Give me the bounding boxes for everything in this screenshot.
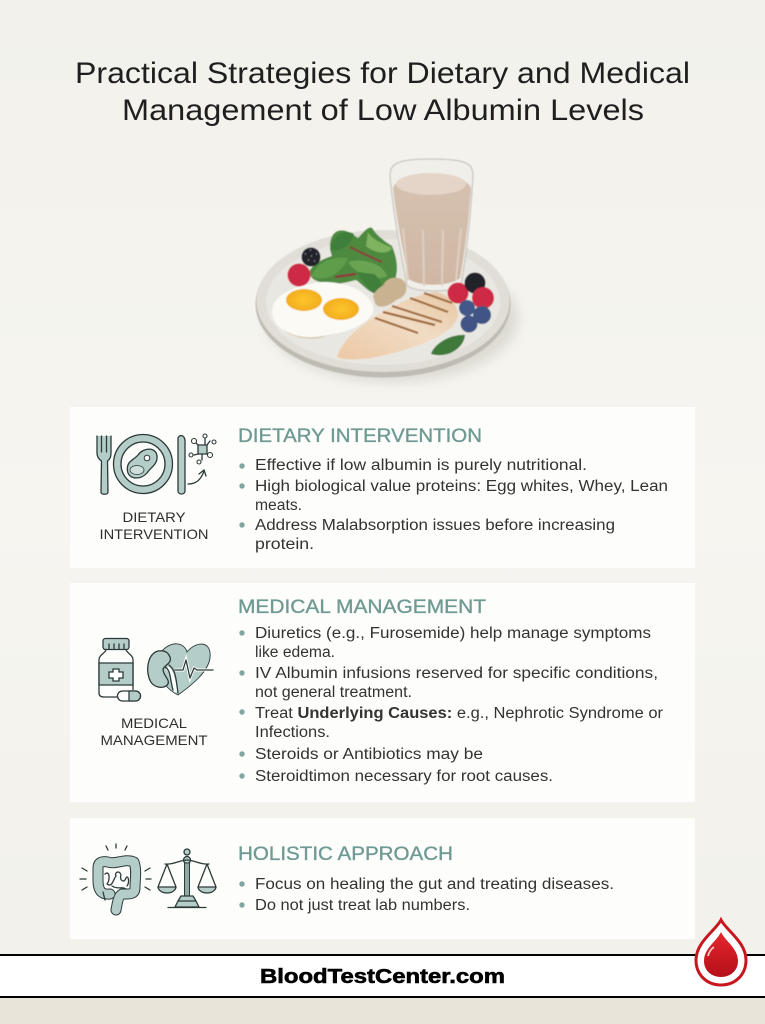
plate <box>256 230 510 378</box>
bullet list <box>239 876 614 914</box>
panel: medical management <box>70 583 695 802</box>
spinach leaf <box>431 335 465 355</box>
heading: DIETARY INTERVENTION <box>238 425 482 447</box>
bullet list: meats. <box>255 497 302 514</box>
bullet list: like edema. <box>255 644 335 661</box>
heading: HOLISTIC APPROACH <box>238 843 453 865</box>
grilled chicken breast <box>337 292 458 359</box>
bullet list: Focus on healing the gut and treating diseases. <box>255 876 614 893</box>
icon: blood drop logo <box>696 920 746 985</box>
bullet list: Infections. <box>255 724 330 741</box>
title <box>75 57 690 127</box>
icon label <box>100 509 208 542</box>
bullet list: not general treatment. <box>255 684 412 701</box>
icon: plate, cutlery and molecule <box>97 434 216 494</box>
icon label: DIETARY <box>122 509 186 525</box>
fried eggs <box>272 282 373 338</box>
illustration: high-protein meal plate with shake <box>256 159 518 382</box>
bullet list: Treat Underlying Causes: e.g., Nephrotic Syndrome or <box>255 705 663 722</box>
bullet list: IV Albumin infusions reserved for specific conditions, <box>255 665 658 682</box>
title: Management of Low Albumin Levels <box>122 94 644 127</box>
bullet list: Do not just treat lab numbers. <box>255 897 470 914</box>
icon label: MANAGEMENT <box>100 732 208 748</box>
title: Practical Strategies for Dietary and Medical <box>75 57 690 90</box>
icon: intestines with radiating lines <box>80 844 151 910</box>
panel: holistic approach <box>70 818 695 939</box>
raspberry left <box>288 264 310 286</box>
footer band <box>0 954 765 1024</box>
icon label <box>100 715 208 748</box>
heading: MEDICAL MANAGEMENT <box>238 596 486 618</box>
bullet list: Diuretics (e.g., Furosemide) help manage symptoms <box>255 625 651 642</box>
mushroom <box>373 278 407 307</box>
bullet list: Address Malabsorption issues before increasing <box>255 517 615 534</box>
bullet list: protein. <box>255 536 314 553</box>
bullet list: High biological value proteins: Egg whites, Whey, Lean <box>255 478 668 495</box>
berries right <box>448 272 494 332</box>
bullet list <box>239 625 663 785</box>
icon: medicine bottle, pill, kidney and heart <box>99 638 213 701</box>
icon: balance scale <box>158 849 216 908</box>
bullet list: Steroids or Antibiotics may be <box>255 746 483 763</box>
panel: dietary intervention <box>70 407 695 568</box>
blackberry left <box>302 248 320 266</box>
drinking glass with protein shake <box>390 159 473 291</box>
icon label: MEDICAL <box>121 715 187 731</box>
bullet list: Steroidtimon necessary for root causes. <box>255 768 553 785</box>
salad greens <box>309 228 397 294</box>
website name: BloodTestCenter.com <box>260 966 505 988</box>
icon label: INTERVENTION <box>100 526 208 542</box>
bullet list: Effective if low albumin is purely nutritional. <box>255 457 587 474</box>
bullet list <box>239 457 668 553</box>
